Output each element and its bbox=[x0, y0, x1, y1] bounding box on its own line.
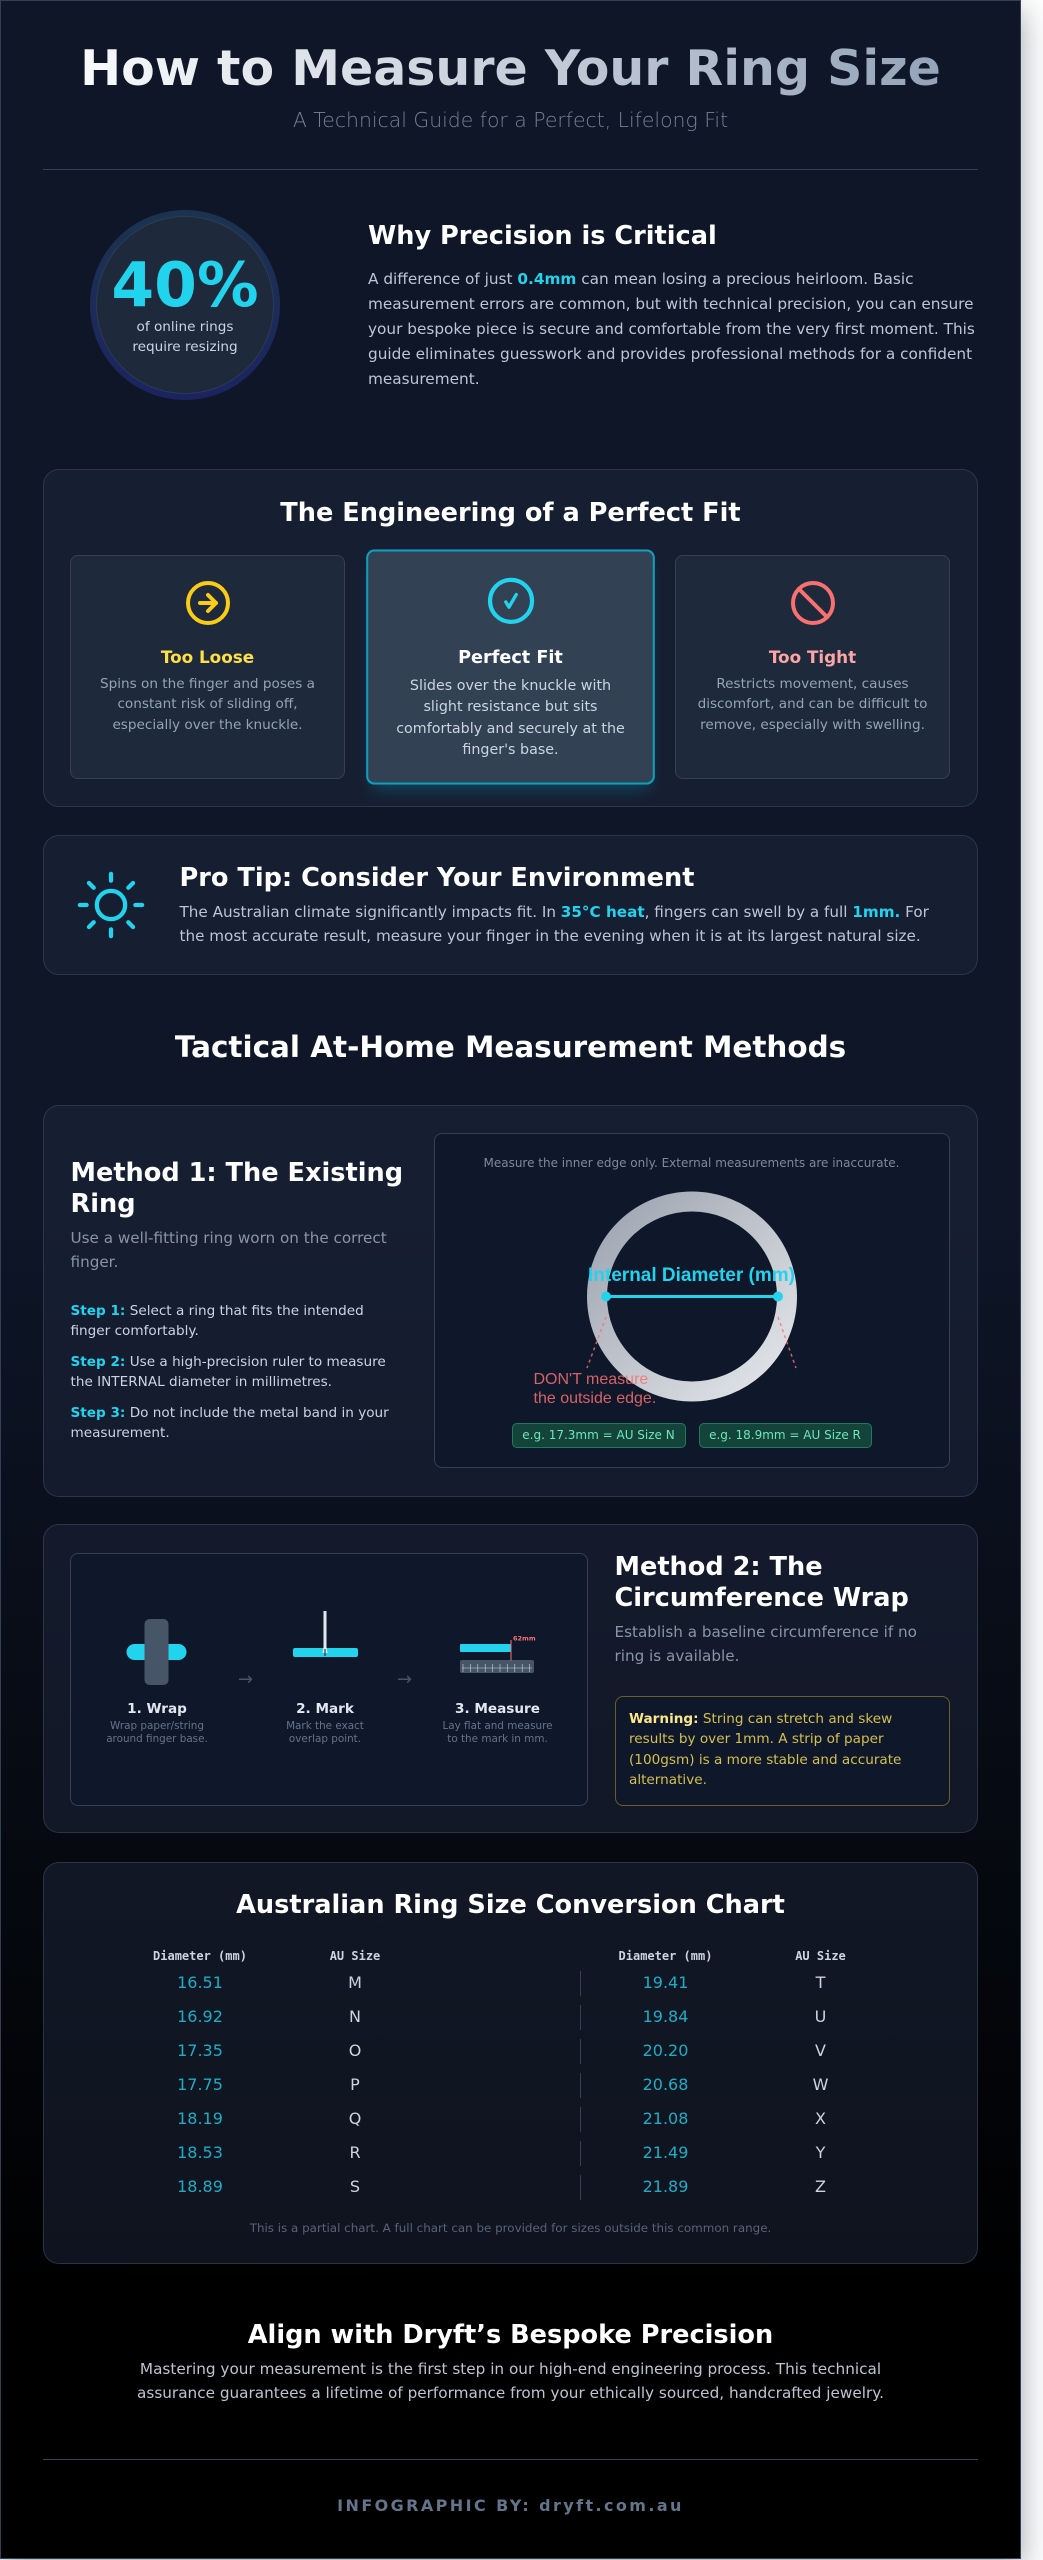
table rows: U bbox=[815, 2007, 826, 2026]
table rows: X bbox=[815, 2109, 826, 2128]
heading: Ring bbox=[70, 1189, 136, 1219]
step 3: Step 3: Do not include the metal band in your bbox=[70, 1405, 389, 1421]
diameter line bbox=[600, 1292, 782, 1302]
table rows: 18.89 bbox=[177, 2177, 223, 2196]
body text bbox=[179, 903, 929, 945]
icon: arrow circle bbox=[186, 581, 230, 625]
step 2 label: 2. Mark bbox=[296, 1701, 354, 1717]
description bbox=[396, 678, 625, 759]
icon: slash circle bbox=[791, 581, 835, 625]
step 1 label: 1. Wrap bbox=[127, 1701, 187, 1717]
table rows: Y bbox=[816, 2143, 825, 2162]
description: Restricts movement, causes bbox=[716, 676, 909, 692]
paragraph: your bespoke piece is secure and comfortable from the very first moment. This bbox=[368, 320, 975, 338]
step 2 description: Mark the exact bbox=[286, 1720, 364, 1732]
table rows: S bbox=[350, 2177, 360, 2196]
arrow: → bbox=[238, 1669, 253, 1690]
closing paragraph bbox=[137, 2360, 884, 2402]
heading: Why Precision is Critical bbox=[368, 221, 717, 251]
warning text: alternative. bbox=[629, 1772, 707, 1788]
table header bbox=[153, 1949, 846, 1963]
step 3 bbox=[70, 1405, 389, 1441]
table rows: 17.35 bbox=[177, 2041, 223, 2060]
table rows: W bbox=[813, 2075, 828, 2094]
description: finger's base. bbox=[462, 742, 559, 759]
table rows: 18.19 bbox=[177, 2109, 223, 2128]
step 1 description bbox=[106, 1720, 208, 1745]
ring diagram bbox=[533, 1192, 797, 1407]
heading: Australian Ring Size Conversion Chart bbox=[236, 1890, 785, 1920]
stat caption: require resizing bbox=[132, 339, 238, 355]
step 3 description: to the mark in mm. bbox=[447, 1733, 548, 1745]
description: especially over the knuckle. bbox=[112, 717, 303, 733]
wrap illustration bbox=[126, 1619, 186, 1685]
subheading: finger. bbox=[70, 1253, 118, 1271]
arrow: → bbox=[397, 1669, 412, 1690]
chip: example N: e.g. 17.3mm = AU Size N bbox=[522, 1428, 675, 1442]
subheading bbox=[70, 1229, 387, 1271]
closing heading: Align with Dryft’s Bespoke Precision bbox=[248, 2320, 773, 2350]
heading: Method 2: The bbox=[614, 1552, 823, 1582]
paragraph: A difference of just 0.4mm can mean losing a precious heirloom. Basic bbox=[368, 270, 914, 288]
step 2 bbox=[70, 1354, 386, 1390]
step 1 description: Wrap paper/string bbox=[110, 1720, 204, 1732]
table rows: 19.41 bbox=[643, 1973, 688, 1992]
measure illustration: 62mm bbox=[513, 1634, 536, 1642]
heading: Pro Tip: Consider Your Environment bbox=[180, 863, 694, 893]
paragraph: measurement errors are common, but with technical precision, you can ensure bbox=[368, 295, 974, 313]
step 2 description bbox=[286, 1720, 364, 1745]
card: too tight bbox=[675, 555, 950, 779]
mark illustration bbox=[293, 1611, 358, 1657]
footnote: This is a partial chart. A full chart can be provided for sizes outside this common range. bbox=[250, 2221, 771, 2235]
table rows: 16.51 bbox=[177, 1973, 223, 1992]
heading: Circumference Wrap bbox=[614, 1583, 909, 1613]
chip: example R bbox=[698, 1423, 872, 1448]
diagram caption: Measure the inner edge only. External measurements are inaccurate. bbox=[483, 1156, 900, 1170]
step 2: Step 2: Use a high-precision ruler to measure bbox=[70, 1354, 386, 1370]
subheading: Use a well-fitting ring worn on the correct bbox=[70, 1229, 387, 1247]
step 3 description: Lay flat and measure bbox=[442, 1720, 553, 1732]
closing paragraph: assurance guarantees a lifetime of performance from your ethically sourced, handcrafted jewelry. bbox=[137, 2384, 884, 2402]
column header: Diameter (mm) bbox=[153, 1949, 247, 1963]
heading bbox=[614, 1552, 909, 1613]
paragraph: guide eliminates guesswork and provides professional methods for a confident bbox=[368, 345, 972, 363]
ring bbox=[596, 1202, 786, 1392]
subheading bbox=[614, 1623, 917, 1665]
table rows: 18.53 bbox=[177, 2143, 223, 2162]
heading: The Engineering of a Perfect Fit bbox=[280, 498, 741, 528]
warning label: DON'T measure bbox=[533, 1371, 648, 1388]
body text: The Australian climate significantly impacts fit. In 35°C heat, fingers can swell by a full 1mm. For bbox=[180, 903, 929, 921]
chip: example N bbox=[512, 1423, 686, 1448]
column header: AU Size bbox=[795, 1949, 846, 1963]
card: too loose bbox=[70, 555, 345, 779]
step 2: the INTERNAL diameter in millimetres. bbox=[70, 1374, 332, 1390]
table rows: R bbox=[349, 2143, 361, 2162]
table rows: M bbox=[348, 1973, 362, 1992]
measure illustration bbox=[460, 1634, 536, 1673]
description: remove, especially with swelling. bbox=[700, 717, 925, 733]
stat caption: of online rings bbox=[137, 319, 233, 335]
paragraph: measurement. bbox=[368, 370, 480, 388]
diameter label: Internal Diameter (mm) bbox=[588, 1265, 794, 1286]
table rows: N bbox=[349, 2007, 361, 2026]
heading: Method 1: The Existing bbox=[70, 1158, 403, 1188]
stat caption bbox=[132, 319, 238, 355]
step 1: Step 1: Select a ring that fits the intended bbox=[70, 1303, 364, 1319]
table rows bbox=[177, 1971, 828, 2200]
step illustrations bbox=[126, 1611, 536, 1685]
stat inner disc bbox=[97, 217, 273, 393]
warning text: results by over 1mm. A strip of paper bbox=[629, 1731, 884, 1747]
table rows: 20.68 bbox=[643, 2075, 688, 2094]
description bbox=[100, 676, 315, 733]
step 1 description: around finger base. bbox=[106, 1733, 208, 1745]
description: Spins on the finger and poses a bbox=[100, 676, 315, 692]
dashed guides bbox=[586, 1317, 796, 1368]
warning text: (100gsm) is a more stable and accurate bbox=[629, 1752, 901, 1768]
chip: example R: e.g. 18.9mm = AU Size R bbox=[709, 1428, 861, 1442]
table rows: T bbox=[816, 1973, 825, 1992]
label: Perfect Fit bbox=[458, 646, 563, 667]
description bbox=[698, 676, 927, 733]
diagram panel: wrap steps bbox=[70, 1553, 588, 1806]
panel: engineering of a perfect fit bbox=[43, 469, 978, 807]
table rows: O bbox=[349, 2041, 361, 2060]
stat number: 40% bbox=[111, 249, 259, 321]
label: Too Loose bbox=[161, 647, 254, 667]
section: why precision is critical bbox=[368, 221, 975, 388]
body text: the most accurate result, measure your finger in the evening when it is at its largest natural size. bbox=[180, 927, 921, 945]
card: perfect fit bbox=[366, 549, 655, 785]
step 2 description: overlap point. bbox=[289, 1733, 361, 1745]
subtitle: A Technical Guide for a Perfect, Lifelong Fit bbox=[293, 108, 728, 132]
step 3 label: 3. Measure bbox=[455, 1701, 540, 1717]
footer credit: INFOGRAPHIC BY: dryft.com.au bbox=[337, 2496, 684, 2515]
closing paragraph: Mastering your measurement is the first step in our high-end engineering process. This technical bbox=[140, 2360, 881, 2378]
paragraph bbox=[368, 270, 975, 388]
subheading: Establish a baseline circumference if no bbox=[614, 1623, 917, 1641]
table rows: 20.20 bbox=[643, 2041, 688, 2060]
heading bbox=[70, 1158, 403, 1219]
table rows: 17.75 bbox=[177, 2075, 223, 2094]
step 3 description bbox=[442, 1720, 553, 1745]
panel: conversion chart bbox=[43, 1862, 978, 2264]
column header: Diameter (mm) bbox=[619, 1949, 712, 1963]
warning text bbox=[629, 1711, 901, 1788]
panel: method 2 bbox=[43, 1524, 978, 1833]
description: constant risk of sliding off, bbox=[117, 696, 298, 712]
title: How to Measure Your Ring Size bbox=[80, 40, 941, 97]
table rows: P bbox=[350, 2075, 360, 2094]
subheading: ring is available. bbox=[614, 1647, 739, 1665]
stat circle: 40% bbox=[90, 210, 280, 400]
table rows: 21.49 bbox=[643, 2143, 688, 2162]
icon: check circle bbox=[488, 578, 534, 624]
panel: pro tip bbox=[43, 835, 978, 975]
step 1: finger comfortably. bbox=[70, 1323, 199, 1339]
icon: sun bbox=[78, 872, 144, 938]
description: slight resistance but sits bbox=[423, 699, 598, 716]
column header: AU Size bbox=[330, 1949, 380, 1963]
table rows: 19.84 bbox=[643, 2007, 688, 2026]
table rows: 16.92 bbox=[177, 2007, 223, 2026]
warning box bbox=[615, 1696, 950, 1806]
description: discomfort, and can be difficult to bbox=[698, 696, 927, 712]
diagram panel: ring bbox=[434, 1133, 950, 1468]
warning label: the outside edge. bbox=[533, 1390, 656, 1407]
table rows: 21.89 bbox=[643, 2177, 688, 2196]
table rows: V bbox=[815, 2041, 826, 2060]
table rows: Z bbox=[815, 2177, 826, 2196]
table rows: 21.08 bbox=[643, 2109, 688, 2128]
description: comfortably and securely at the bbox=[396, 720, 625, 737]
table rows: Q bbox=[349, 2109, 361, 2128]
step 1 bbox=[70, 1303, 364, 1339]
warning text: Warning: String can stretch and skew bbox=[629, 1711, 892, 1727]
description: Slides over the knuckle with bbox=[410, 678, 611, 694]
step 3: measurement. bbox=[70, 1425, 170, 1441]
label: Too Tight bbox=[769, 647, 856, 667]
panel: method 1 bbox=[43, 1105, 978, 1497]
section heading: tactical methods: Tactical At-Home Measurement Methods bbox=[175, 1030, 846, 1064]
